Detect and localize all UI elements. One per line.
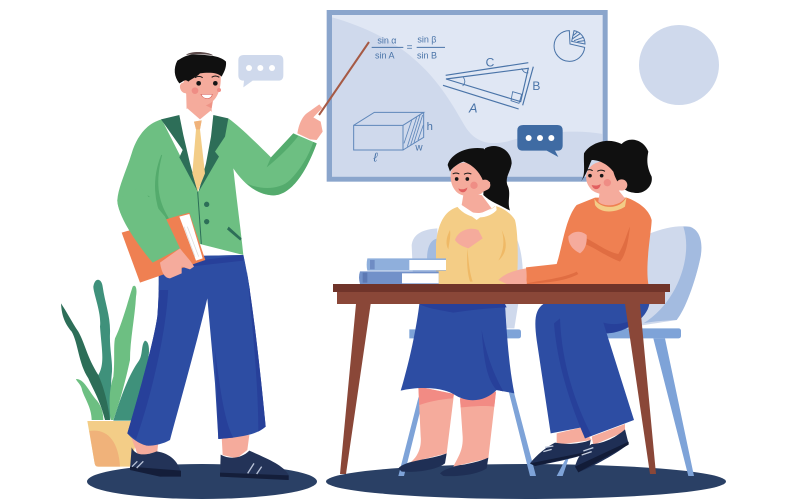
neck [186,87,212,123]
upper book [367,258,446,271]
face details [586,170,611,189]
trousers [535,304,649,438]
folder pages [179,214,203,261]
board frame [327,10,608,182]
speech bubble grey [238,55,283,87]
shoes [530,440,591,466]
trouser shade right [215,270,266,439]
triangle labels: C [486,56,495,70]
teacher upper body [117,52,323,290]
cuboid labels: ℓ [373,151,378,165]
student one lower body [398,303,536,476]
left shoe [130,447,181,477]
cuboid labels: h [427,121,433,133]
neck and collar [594,197,627,211]
chair back shade [643,227,701,323]
clasped hands [455,229,483,248]
lapels [161,115,228,192]
hair [581,140,652,193]
eyes and brows [195,76,219,86]
trouser shade [554,318,637,438]
cheeks [192,87,198,94]
book stack [359,258,446,284]
left chair legs [398,390,536,476]
cuboid labels [373,121,433,165]
hair [448,148,492,187]
table leg and frame [340,304,656,474]
cuboid labels: w [414,143,423,154]
table top [333,284,670,292]
tie [192,120,205,192]
pie chart icon [554,31,585,61]
shoe stripes [132,461,262,474]
knee shade [418,387,496,407]
decorative circle [639,25,719,105]
floor shadow right [326,464,726,499]
trousers [127,255,266,446]
left chair back [412,228,523,285]
student one upper body [359,146,518,284]
shirt [179,108,215,192]
skirt shade [419,304,507,391]
triangle labels: A [468,102,477,116]
table [333,284,670,304]
jacket cuff over folder [117,187,180,263]
left chair seat [409,329,521,338]
triangle labels: B [532,79,540,93]
chair back [607,226,701,332]
sine rule formula: sin A [375,51,394,61]
floor shadow left [87,464,317,499]
trouser shade left [127,257,168,439]
collar [457,205,497,217]
holding hand [160,248,194,278]
triangle labels [468,56,540,116]
back hair [483,146,512,211]
plant [61,280,149,467]
jacket shading [247,133,317,195]
light green leaf [110,286,137,420]
small green leaf [76,379,103,420]
sweater shading [527,227,630,284]
head [586,162,625,195]
pointer stick [319,42,369,115]
ankles [557,424,625,445]
hand on chest [568,232,587,253]
right chair [557,226,701,476]
sine rule formula: sin β [417,35,436,45]
hair [175,54,226,83]
student two upper body [498,140,652,284]
ear [480,180,490,190]
neck [462,195,492,215]
board surface [332,15,603,177]
laces [543,446,593,455]
head [451,162,490,196]
jacket [117,118,317,263]
hand on table [498,268,527,284]
sweater folds [447,230,506,282]
pocket seam [209,262,216,284]
table apron [337,292,665,304]
ear [616,179,627,191]
skirt [401,304,514,400]
pot shade [89,431,120,467]
chair back legs [557,338,694,476]
lower book [359,271,439,284]
blue speech bubble [517,125,563,157]
jacket buttons and seam [198,192,242,244]
dark leaf [61,303,110,420]
sweater [436,206,518,284]
student two lower body [530,304,649,472]
head [180,69,221,107]
sine rule formula [372,35,445,61]
waistband [159,255,250,290]
sine rule formula: sin B [417,50,437,60]
board shaded area [332,17,603,177]
whiteboard [327,10,608,182]
back right leaf [113,341,149,421]
teacher legs and shoes [127,255,289,480]
tall teal leaf [93,280,112,420]
pot [87,421,142,467]
triangle diagram [443,56,540,116]
cuboid diagram [354,112,433,165]
folder [122,213,205,283]
smile [201,94,212,99]
front legs [340,304,656,474]
flats [398,453,488,476]
sweater [526,198,652,284]
legs [410,387,454,463]
right shoe [220,451,289,480]
raised hand [297,104,323,140]
face details [453,173,478,192]
teacher [117,42,369,480]
formula left: sin α [377,35,397,45]
ankles [132,435,249,458]
sine rule formula: = [407,43,413,54]
chair seat [607,328,681,338]
